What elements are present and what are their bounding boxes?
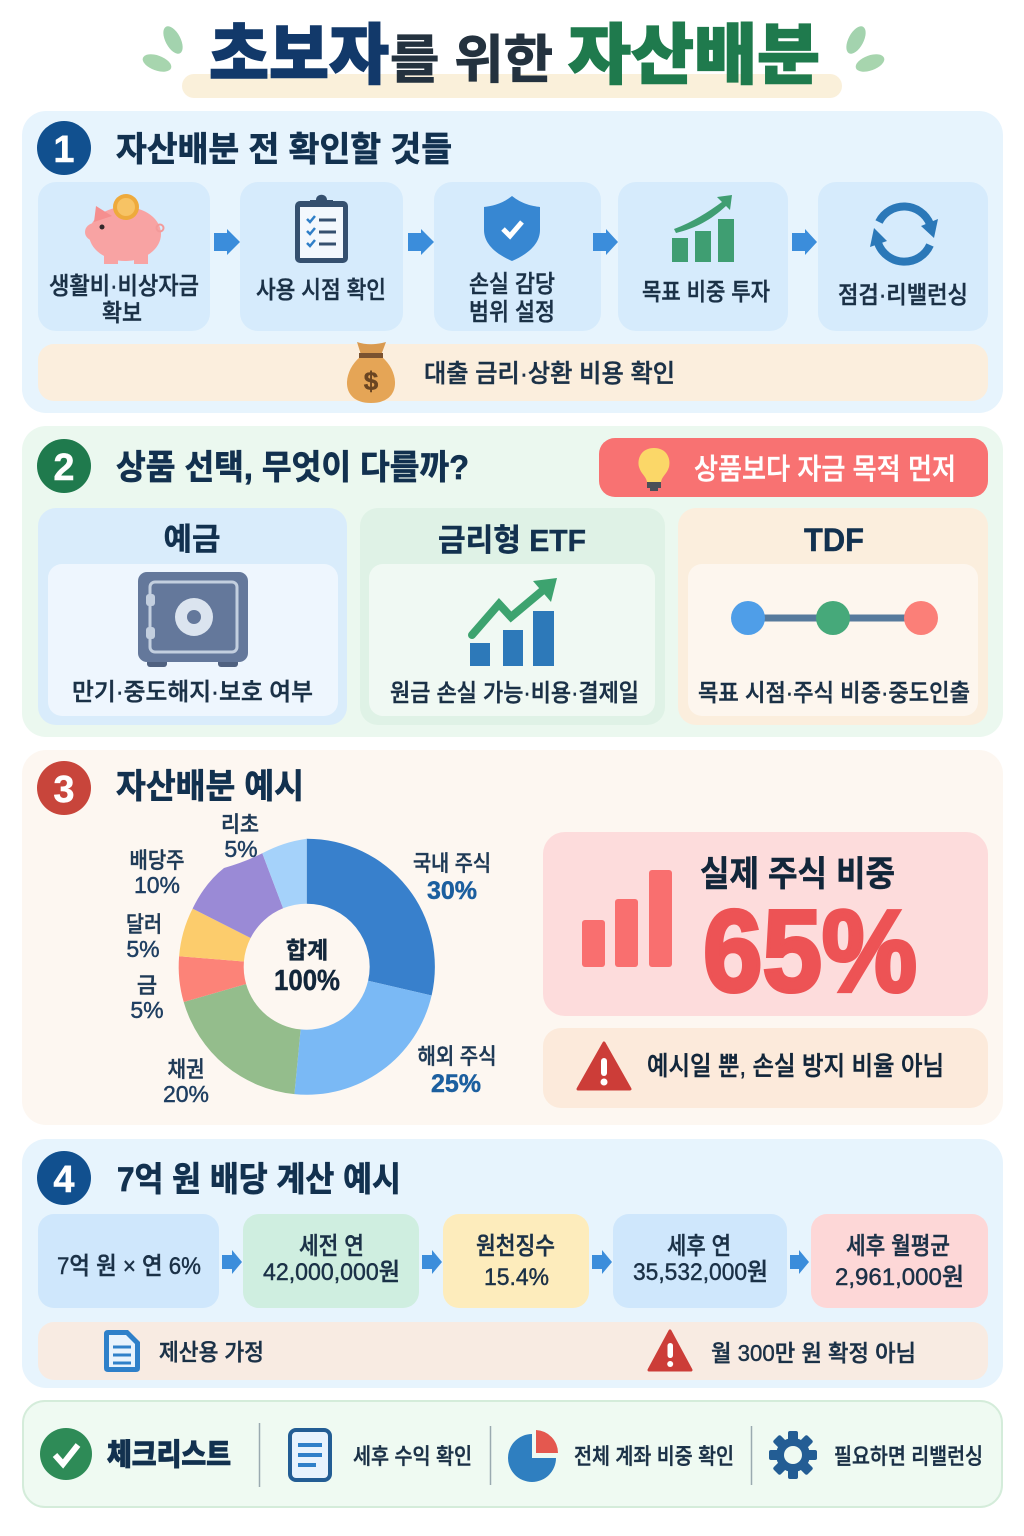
checklist title: 체크리스트 bbox=[107, 1439, 231, 1472]
label: 해외 주식: 25% bbox=[431, 1070, 481, 1098]
card title: 실제 주식 비중 bbox=[700, 855, 895, 894]
card text: 만기·중도해지·보호 여부 bbox=[72, 679, 313, 706]
label: 달러: 5% bbox=[126, 936, 160, 962]
icon: rising bars bbox=[672, 195, 734, 262]
title bbox=[140, 18, 887, 98]
card title: 예금 bbox=[164, 522, 220, 557]
item: 세후 수익 확인 bbox=[290, 1430, 472, 1480]
label: 해외 주식 bbox=[418, 1044, 496, 1098]
heading: 자산배분 전 확인할 것들 bbox=[116, 131, 452, 169]
step: 세후 월평균: 세후 월평균 bbox=[846, 1233, 950, 1260]
icon: bar chart with arrow bbox=[470, 578, 557, 666]
section number 4 bbox=[37, 1151, 91, 1205]
warning bar bbox=[543, 1028, 988, 1108]
icon: sync arrows bbox=[870, 207, 938, 262]
panel: 상품 선택 bbox=[22, 426, 1003, 737]
card: 실제 주식 비중 65% bbox=[543, 832, 988, 1016]
panel: 자산배분 전 확인할 것들 bbox=[22, 111, 1003, 413]
donut chart bbox=[179, 839, 435, 1095]
callout: 상품보다 자금 목적 먼저 bbox=[599, 438, 988, 497]
step: 7억 원 × 연 6% bbox=[38, 1214, 219, 1308]
arrow bbox=[408, 229, 434, 255]
arrow bbox=[790, 1250, 809, 1274]
arrow bbox=[222, 1250, 242, 1274]
label: 목표 비중 투자 bbox=[642, 279, 770, 306]
icon: clipboard checklist bbox=[295, 195, 348, 263]
label: 금: 금 bbox=[137, 973, 157, 998]
card title: 금리형 ETF bbox=[438, 523, 586, 558]
segment: 금 5% bbox=[179, 956, 246, 1002]
icon: check circle bbox=[40, 1428, 92, 1480]
arrow bbox=[214, 229, 240, 255]
step: 원천징수 bbox=[443, 1214, 589, 1308]
item: 필요하면 리밸런싱 bbox=[769, 1431, 983, 1479]
section number 2 bbox=[37, 439, 91, 493]
label: 손실 감당 bbox=[469, 271, 555, 298]
label: 달러 bbox=[126, 912, 162, 962]
arrow bbox=[593, 229, 618, 255]
segment: 리츠 5% bbox=[262, 839, 307, 908]
item: 필요하면 리밸런싱: 필요하면 리밸런싱 bbox=[834, 1444, 983, 1469]
card: 예금 bbox=[38, 508, 347, 725]
segment: 해외 주식 25% bbox=[294, 981, 432, 1095]
step: 세후 월평균 bbox=[811, 1214, 988, 1308]
label: 국내 주식 bbox=[413, 851, 491, 905]
card: 금리형 ETF bbox=[360, 508, 665, 725]
center total: 100% bbox=[274, 965, 340, 997]
label: 국내 주식: 30% bbox=[427, 877, 477, 905]
heading: 7억 원 배당 계산 예시 bbox=[117, 1161, 401, 1199]
card: 사용 시점 확인 bbox=[240, 182, 403, 331]
label: 채권: 20% bbox=[163, 1081, 209, 1107]
step: 세후 월평균: 2,961,000원 bbox=[835, 1264, 964, 1291]
step: 세전 연: 42,000,000원 bbox=[263, 1259, 400, 1286]
label: 금: 5% bbox=[130, 997, 164, 1023]
title: 를 위한 bbox=[390, 32, 553, 90]
label: 점검·리밸런싱 bbox=[838, 282, 968, 309]
icon: money bag bbox=[347, 342, 395, 403]
section number 4: 4 bbox=[53, 1159, 75, 1201]
big number: 65% bbox=[703, 886, 917, 1016]
arrow bbox=[592, 1250, 612, 1274]
label: 생활비·비상자금 bbox=[49, 273, 199, 300]
icon: bars bbox=[582, 870, 672, 967]
icon: piggy bank bbox=[85, 194, 164, 264]
section number 3: 3 bbox=[53, 769, 75, 811]
panel: 자산배분 예시 bbox=[22, 750, 1003, 1125]
label: 채권 bbox=[163, 1057, 209, 1107]
step: 세후 연: 세후 연 bbox=[667, 1233, 731, 1260]
step: 원천징수: 원천징수 bbox=[476, 1233, 555, 1260]
icon: gear bbox=[769, 1431, 817, 1479]
section number 1: 1 bbox=[53, 129, 75, 171]
card title: TDF bbox=[804, 522, 864, 558]
icon: document bbox=[104, 1330, 140, 1372]
card: 손실 감당 범위 설정 bbox=[434, 182, 601, 331]
step: 세후 연: 35,532,000원 bbox=[633, 1259, 768, 1286]
icon: pie chart bbox=[508, 1430, 558, 1482]
item: 전체 계좌 비중 확인 bbox=[508, 1430, 734, 1482]
center total bbox=[274, 937, 340, 997]
label: 배당주: 배당주 bbox=[130, 848, 184, 873]
icon: timeline dots bbox=[731, 601, 938, 635]
section number 2: 2 bbox=[53, 447, 75, 489]
icon: warning triangle bbox=[578, 1043, 630, 1089]
step: 원천징수: 15.4% bbox=[484, 1264, 549, 1291]
segment: 국내 주식 30% bbox=[307, 839, 435, 996]
card text: 원금 손실 가능·비용·결제일 bbox=[390, 680, 639, 707]
segment: 달러 5% bbox=[179, 909, 251, 962]
panel: 7억 원 배당 계산 예시 bbox=[22, 1139, 1003, 1388]
label: 리초: 5% bbox=[224, 836, 258, 862]
step: 7억 원 × 연 6%: 7억 원 × 연 6% bbox=[57, 1253, 201, 1280]
icon: shield bbox=[484, 196, 540, 261]
icon: document bbox=[290, 1430, 330, 1480]
label: 리초: 리초 bbox=[221, 812, 259, 837]
label: 상품보다 자금 목적 먼저 bbox=[694, 453, 956, 486]
note text: 월 300만 원 확정 아님 bbox=[711, 1340, 916, 1366]
heading: 자산배분 예시 bbox=[116, 768, 304, 806]
bar: 대출 금리·상환 비용 확인 bbox=[38, 342, 988, 403]
arrow bbox=[792, 229, 817, 255]
card: 목표 비중 투자 bbox=[618, 182, 788, 331]
step: 세전 연 bbox=[243, 1214, 419, 1308]
center total: 합계 bbox=[286, 937, 328, 963]
card: TDF bbox=[678, 508, 988, 725]
warning text: 예시일 뿐, 손실 방지 비율 아님 bbox=[647, 1051, 944, 1081]
heading: 상품 선택, 무엇이 다를까? bbox=[116, 449, 469, 487]
card text: 목표 시점·주식 비중·중도인출 bbox=[698, 680, 970, 707]
label: 사용 시점 확인 bbox=[256, 277, 386, 304]
label: 대출 금리·상환 비용 확인 bbox=[424, 360, 675, 388]
label: 달러: 달러 bbox=[126, 912, 162, 937]
section number 3 bbox=[37, 761, 91, 815]
card: 점검·리밸런싱 bbox=[818, 182, 988, 331]
label: 채권: 채권 bbox=[168, 1057, 204, 1082]
icon: safe bbox=[138, 572, 248, 667]
label: 배당주: 10% bbox=[134, 872, 180, 898]
item: 세후 수익 확인: 세후 수익 확인 bbox=[353, 1444, 472, 1469]
card: 손실 감당 범위 설정: 범위 설정 bbox=[469, 299, 555, 326]
arrow bbox=[422, 1250, 442, 1274]
note text: 제산용 가정 bbox=[159, 1339, 264, 1365]
label: 배당주 bbox=[130, 848, 184, 898]
step: 세후 연 bbox=[613, 1214, 787, 1308]
segment: 채권 20% bbox=[184, 984, 301, 1094]
title: 자산배분 bbox=[568, 18, 820, 92]
icon: light bulb bbox=[639, 448, 669, 491]
label: 리초 bbox=[221, 812, 259, 862]
icon: money bag: $ bbox=[364, 366, 379, 396]
panel: 체크리스트 bbox=[23, 1401, 1002, 1507]
icon: warning triangle bbox=[649, 1331, 691, 1370]
title: 초보자 bbox=[209, 18, 389, 92]
label: 해외 주식: 해외 주식 bbox=[418, 1044, 496, 1069]
label: 국내 주식: 국내 주식 bbox=[413, 851, 491, 876]
notes bar bbox=[38, 1322, 988, 1380]
label: 금 bbox=[130, 973, 164, 1023]
card: 생활비·비상자금 확보 bbox=[38, 182, 210, 331]
step: 세전 연: 세전 연 bbox=[299, 1233, 364, 1260]
section number 1 bbox=[37, 121, 91, 175]
item: 전체 계좌 비중 확인: 전체 계좌 비중 확인 bbox=[574, 1444, 734, 1469]
card: 생활비·비상자금 확보: 확보 bbox=[102, 300, 142, 327]
segment: 배당주 10% bbox=[193, 853, 283, 938]
